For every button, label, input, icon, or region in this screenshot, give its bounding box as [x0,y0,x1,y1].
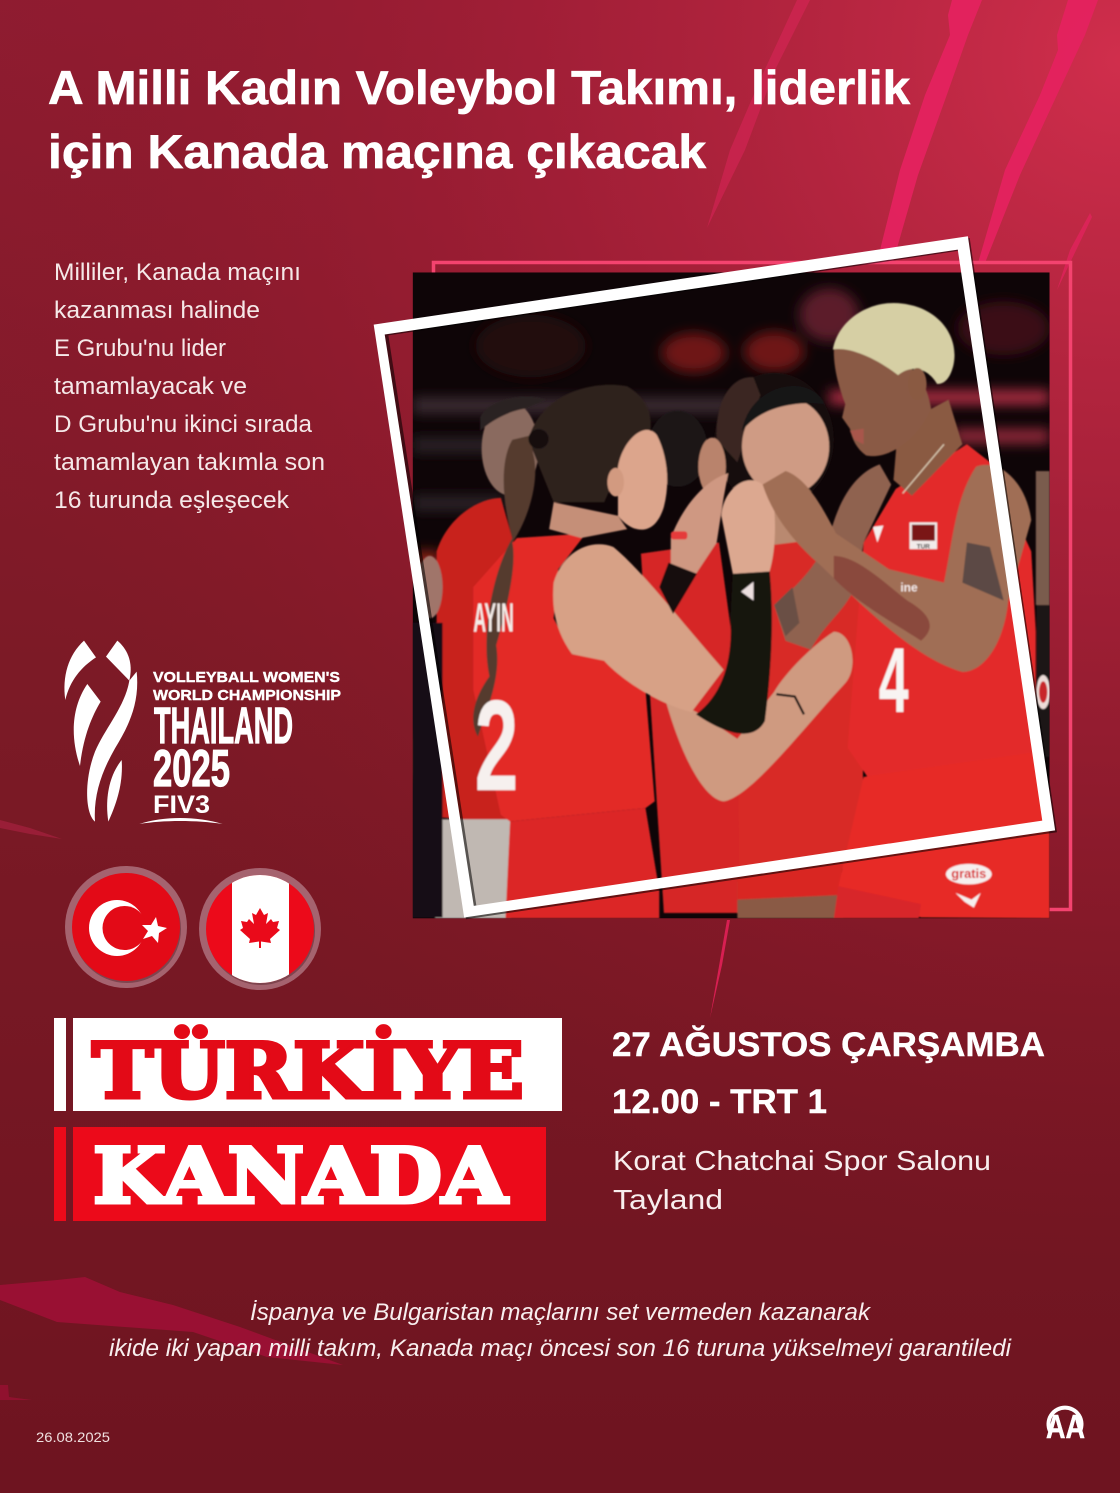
championship logo: FIV3 [153,791,210,819]
venue [613,1145,991,1215]
match date and channel: 12.00 - TRT 1 [612,1083,827,1121]
title: A Milli Kadın Voleybol Takımı, liderlik [48,61,911,114]
left player [473,385,853,918]
pink frame behind photo [434,262,1070,910]
venue: Tayland [613,1184,723,1215]
summary text block: Milliler, Kanada maçını [54,259,301,286]
left player: 2 [475,673,518,818]
photo: players high-fiving [374,236,1057,919]
title: için Kanada maçına çıkacak [48,125,707,178]
match date and channel: 27 AĞUSTOS ÇARŞAMBA [612,1026,1045,1064]
right player: gratis [951,867,986,881]
championship logo [64,641,341,824]
championship logo: 2025 [153,740,230,798]
championship logo: THAILAND [154,697,293,754]
team bar: Kanada: KANADA [93,1132,508,1220]
summary text block: D Grubu'nu ikinci sırada [54,411,313,438]
flag: Kanada [199,868,321,990]
team bar: Türkiye: TÜRKİYE [92,1026,524,1116]
left player: AYIN [473,594,514,641]
summary text block [54,259,325,514]
date stamp: 26.08.2025 [36,1430,110,1445]
match date and channel [612,1026,1045,1121]
footnote text: İspanya ve Bulgaristan maçlarını set vermeden kazanarak [250,1299,872,1326]
summary text block: E Grubu'nu lider [54,335,226,362]
venue: Korat Chatchai Spor Salonu [613,1145,991,1176]
summary text block: kazanması halinde [54,297,260,324]
right player [763,303,1050,918]
flag: Türkiye [65,866,187,988]
right player: ine [900,582,918,595]
rear-center teammates [641,373,864,918]
championship logo: WORLD CHAMPIONSHIP [153,687,341,704]
rear-left teammate [413,397,547,918]
footnote text: ikide iki yapan milli takım, Kanada maçı öncesi son 16 turuna yükselmeyi garantiledi [109,1335,1012,1362]
title [48,61,911,178]
summary text block: 16 turunda eşleşecek [54,487,290,514]
right player: TUR [917,543,930,550]
footnote text [109,1299,1012,1362]
summary text block: tamamlayacak ve [54,373,247,400]
championship logo: VOLLEYBALL WOMEN'S [153,669,340,686]
summary text block: tamamlayan takımla son [54,449,325,476]
AA agency logo: AA [1046,1408,1085,1445]
right player: 4 [879,629,909,732]
white tilted frame [374,236,1057,919]
